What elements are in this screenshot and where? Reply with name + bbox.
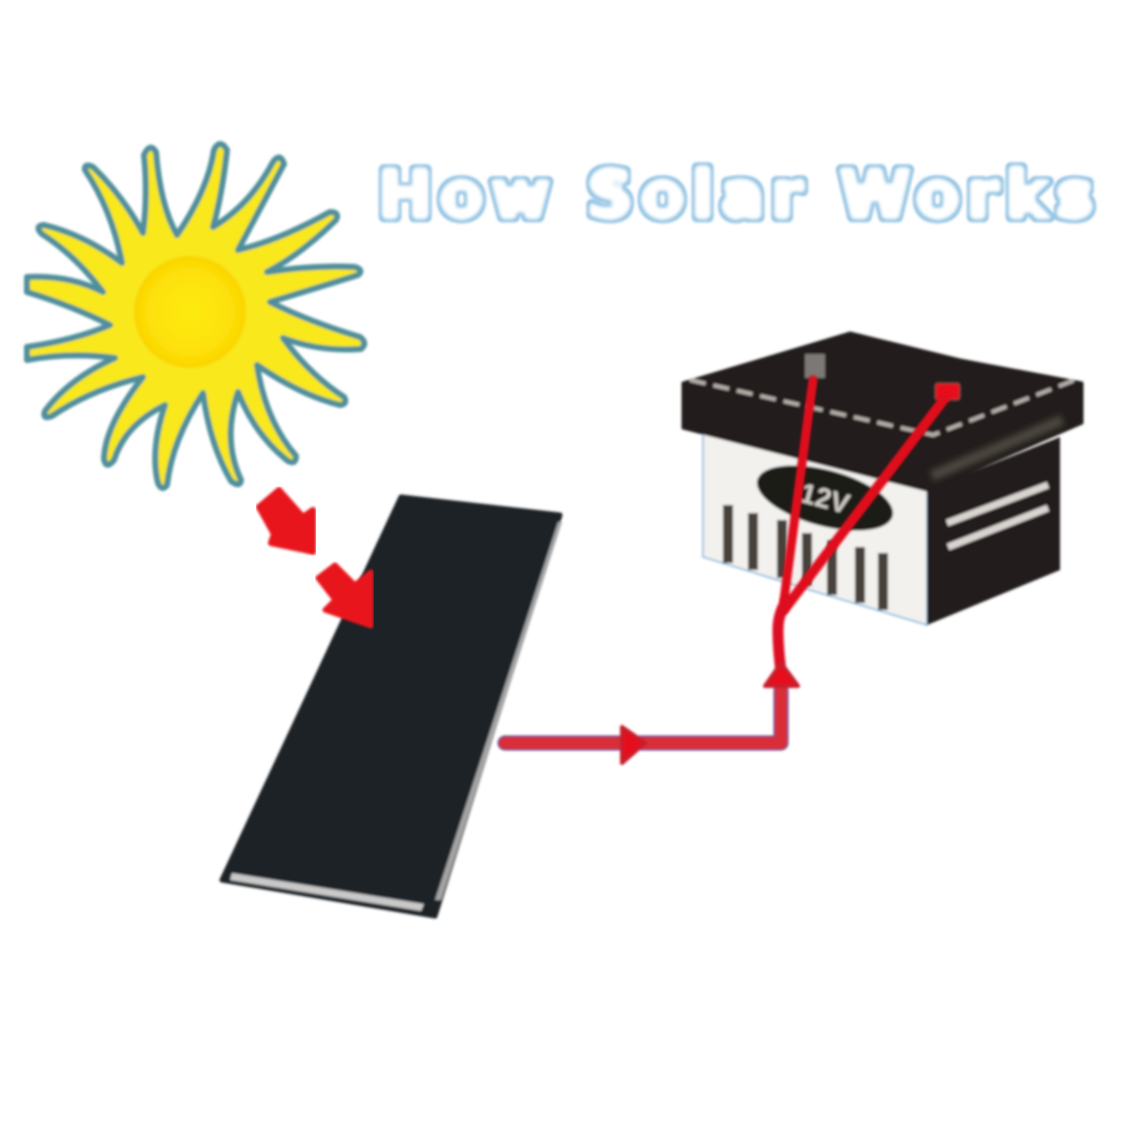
panel body: [222, 497, 560, 916]
battery lid: [683, 333, 1082, 490]
battery voltage label: [750, 453, 900, 543]
charging line from panel to battery: [505, 603, 798, 763]
horizontal flow arrowhead: [622, 727, 645, 763]
negative terminal: [805, 354, 825, 378]
panel bottom edge highlight: [230, 873, 424, 911]
positive terminal: [935, 383, 960, 400]
battery front face: [703, 433, 927, 625]
upper riser wire: [778, 603, 785, 680]
solar panel: [222, 497, 562, 916]
battery: [683, 333, 1082, 625]
battery wires: [784, 380, 945, 610]
sun: [27, 144, 364, 488]
battery front slots: [728, 505, 883, 610]
sun core: [134, 256, 246, 368]
wire to positive terminal: [784, 398, 945, 610]
panel right edge highlight: [435, 522, 562, 900]
vertical flow arrowhead: [765, 663, 798, 686]
connector wire core: [505, 690, 781, 743]
sun rays: [27, 144, 364, 488]
connector wire outline: [505, 690, 781, 743]
sunlight arrow 1: [259, 490, 313, 552]
battery lid highlight: [932, 420, 1062, 476]
battery side stripes: [947, 485, 1048, 547]
battery voltage label: 12V: [797, 477, 853, 520]
battery lid seam: [690, 380, 1075, 435]
battery side face: [927, 437, 1060, 625]
sunlight arrow 2: [318, 565, 371, 626]
title: How Solar Works: [378, 158, 1094, 233]
wire to negative terminal: [784, 380, 813, 600]
